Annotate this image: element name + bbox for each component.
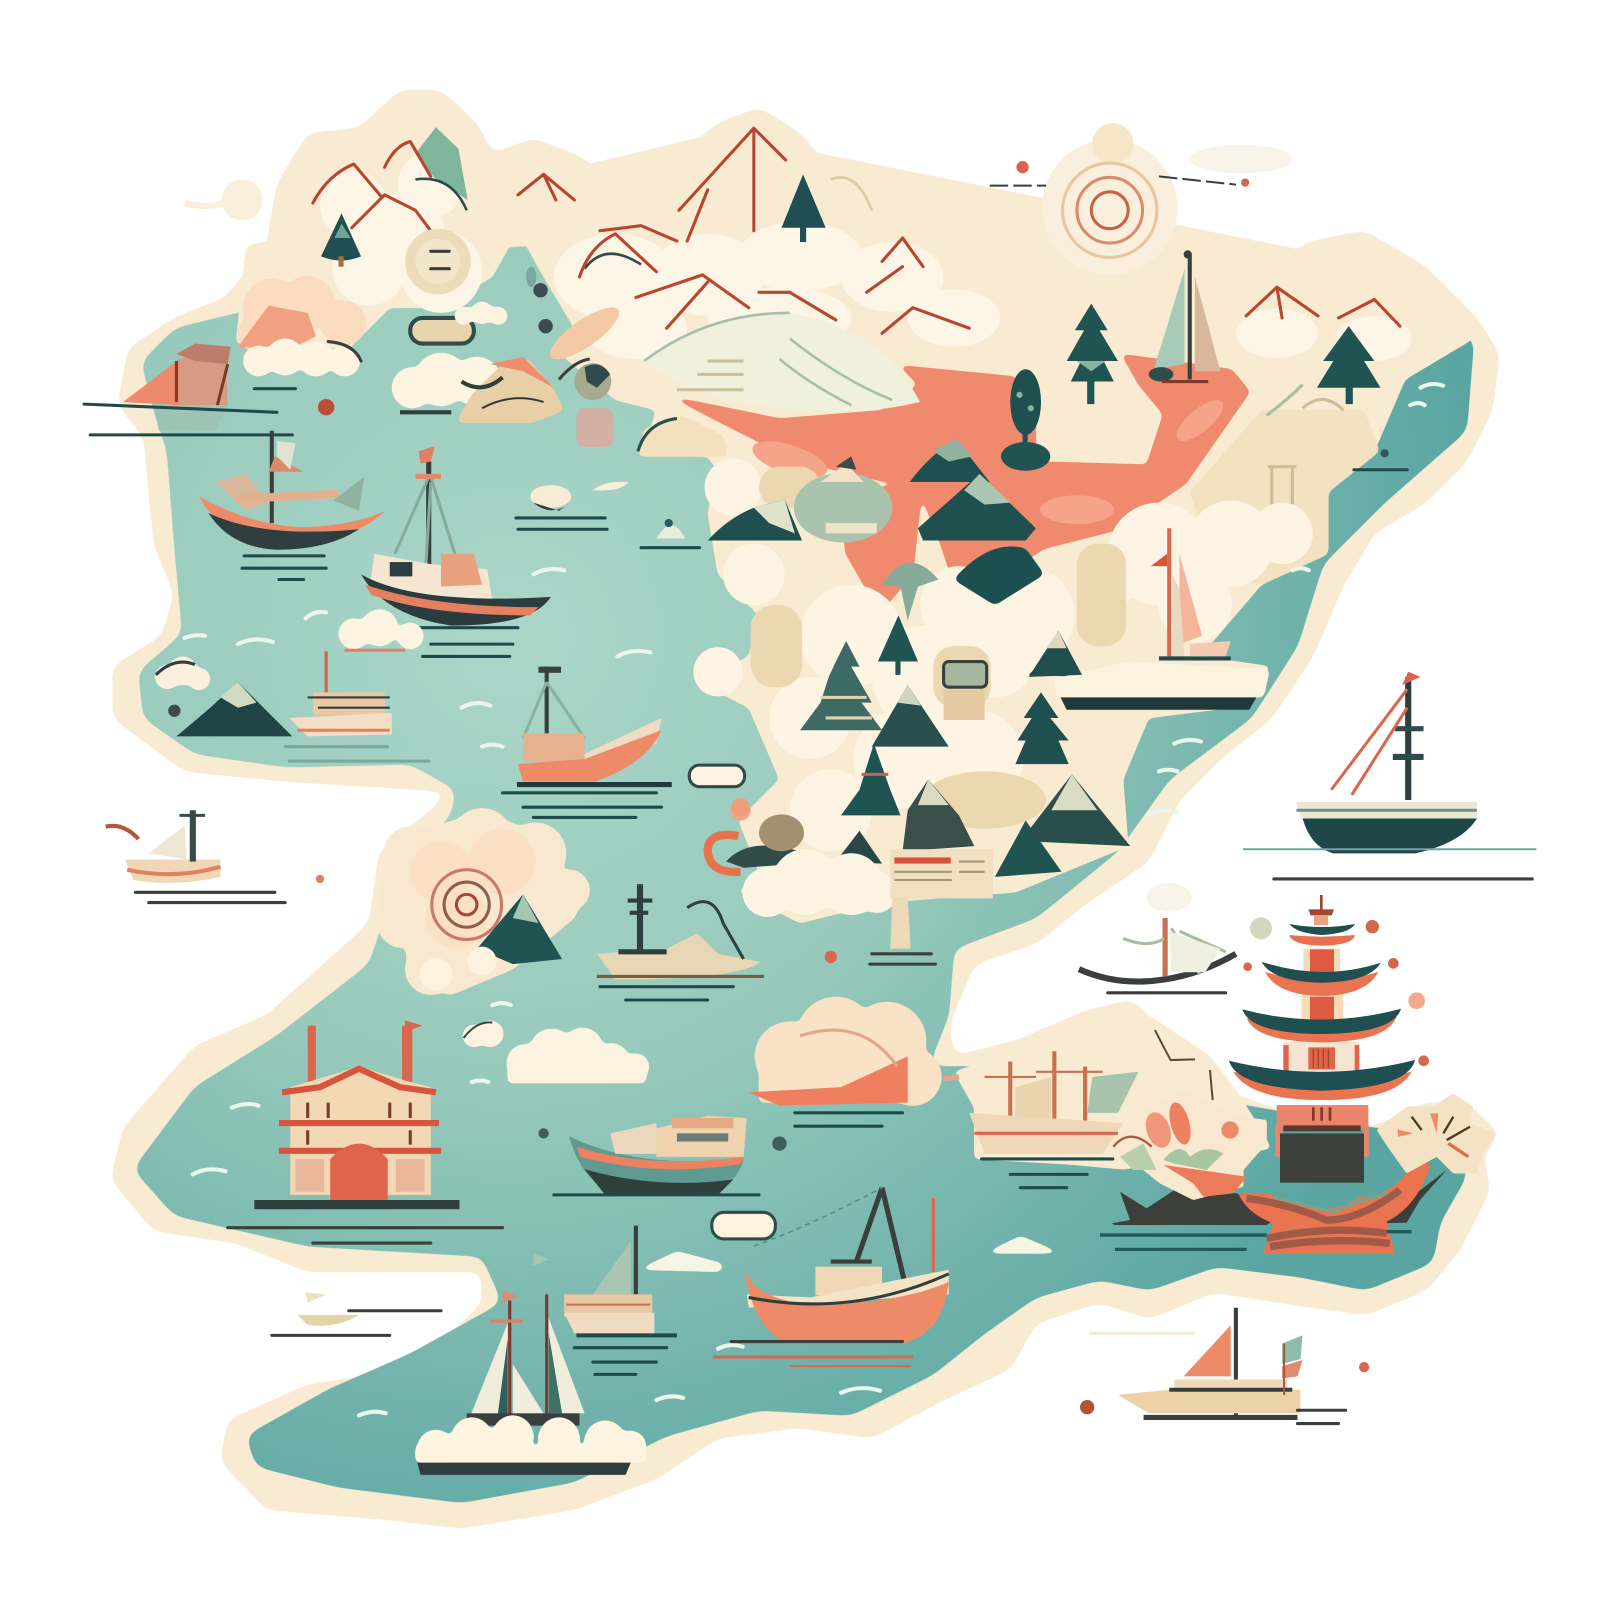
- small mountain east cape: [1029, 631, 1082, 677]
- beacon: [870, 897, 935, 964]
- cloud: ringed south: [712, 1212, 775, 1239]
- tree: coral pine: [1001, 369, 1050, 471]
- dark marker dot: [825, 951, 837, 963]
- tree: north pine: [782, 174, 826, 242]
- east waves: [1147, 384, 1443, 815]
- tug lines: [600, 987, 733, 1000]
- cloud: white mini: [638, 1236, 1062, 1272]
- flag twin sail: [503, 1253, 549, 1303]
- boat: west small: [289, 651, 392, 736]
- flower: right petals: [1377, 1093, 1497, 1173]
- peach volcano: [238, 276, 366, 352]
- boat lines large: [713, 1342, 913, 1366]
- dark mound: [954, 547, 1044, 605]
- cloud: small over sea: [338, 609, 424, 650]
- flower: left cluster: [1110, 1030, 1267, 1200]
- cloud: west shore: [243, 338, 361, 376]
- boat: fishing trawler: [361, 446, 551, 626]
- dark dots north: [526, 267, 553, 333]
- waves west: [185, 569, 880, 1415]
- swirl: [410, 829, 535, 949]
- dark cloud marker east: [1354, 449, 1407, 470]
- peach log: [543, 299, 626, 368]
- lines green hull: [554, 1193, 759, 1196]
- boat lines 3: [516, 518, 607, 529]
- canoe: [1079, 918, 1236, 993]
- lines below red boat: [795, 1113, 903, 1126]
- pagoda tree: [800, 641, 882, 730]
- east sailboat: [1151, 528, 1231, 658]
- cloud island with boat base: [1054, 662, 1270, 710]
- boat: green hull central: [569, 1116, 747, 1195]
- curl creature: [708, 800, 804, 872]
- sage tree: [882, 563, 938, 621]
- island: swirl headland: [377, 808, 590, 995]
- boat: red hull west: [199, 431, 386, 550]
- cloud island south: [415, 1415, 646, 1475]
- boat: large coral hull: [744, 1188, 949, 1344]
- boat: south small: [564, 1226, 677, 1335]
- ship lines: [982, 1159, 1113, 1188]
- boat lines west small: [285, 747, 429, 761]
- sailboat inland: [1149, 250, 1221, 382]
- pavilion: [944, 662, 987, 720]
- tan eastern slope: [1190, 410, 1379, 585]
- tree: east pine: [1317, 326, 1381, 404]
- dark mountains south: [872, 641, 1082, 764]
- orange dot: [731, 798, 750, 816]
- tree: island pine: [1067, 304, 1118, 404]
- hill contour arcs: [415, 177, 872, 269]
- shore lines west: [84, 389, 295, 435]
- mountain: west headland: [708, 499, 802, 541]
- pink building: [890, 849, 993, 898]
- boat lines 1: [242, 556, 326, 579]
- small cloud northwest: [185, 179, 263, 221]
- twin sail boat: [467, 1294, 585, 1431]
- dinghy lines: [135, 892, 285, 903]
- pine: center: [878, 615, 918, 675]
- small buoy: [641, 519, 699, 548]
- island: east shore behind pagoda: [954, 1015, 1272, 1169]
- tiny boat far: [272, 1292, 441, 1335]
- east coast scribbles: [1267, 385, 1344, 523]
- cloud: small north: [454, 302, 508, 325]
- boat southeast: [1118, 1308, 1303, 1417]
- southeast dots: [1080, 1362, 1369, 1414]
- dark mountain cluster: [910, 439, 990, 482]
- faded pink figure: [576, 408, 613, 447]
- red mountain ridges: [313, 128, 1400, 333]
- pagoda: [1100, 895, 1447, 1253]
- cloud: small ring far west: [155, 656, 210, 717]
- dark knot: [559, 359, 611, 400]
- clouds below swirl: [419, 947, 496, 991]
- sea: [133, 246, 1474, 1503]
- cloud: ringed: [410, 318, 474, 344]
- large snow mountain: [918, 474, 1036, 541]
- red dot: [318, 399, 334, 415]
- medallion: [405, 229, 471, 294]
- central peninsula clouds: [693, 458, 1313, 851]
- tree: north small: [321, 213, 361, 267]
- north snow hills: [320, 152, 1411, 361]
- ship lines: [1243, 849, 1536, 879]
- cloud: south clouds: [463, 1021, 649, 1083]
- tan cliffs: [751, 467, 1126, 829]
- boat lines 2: [405, 628, 518, 656]
- cloud island: central shore: [392, 353, 564, 423]
- temple lines: [228, 1228, 503, 1243]
- red dot far west: [316, 875, 324, 883]
- sun swirl: [1042, 123, 1177, 275]
- right ship: [1296, 672, 1477, 853]
- cream island red boat: [749, 997, 959, 1106]
- dots: [538, 1128, 787, 1151]
- sun rays and dots: [990, 145, 1292, 187]
- snowy peaks: [836, 774, 1130, 877]
- tree: red-banded: [841, 744, 901, 815]
- boat: central pink hull: [517, 667, 672, 785]
- dome shell: [644, 313, 920, 412]
- cloud: central sea: [689, 765, 745, 787]
- cream sticker border: [111, 90, 1499, 1528]
- mountain island west: [176, 682, 292, 736]
- rock cloud: [638, 415, 728, 456]
- cloud: south of peninsula: [743, 849, 897, 917]
- boulder north sea: [530, 482, 629, 511]
- temple: [254, 1021, 459, 1209]
- smoke above canoe: [1147, 883, 1192, 912]
- sailing ship east: [969, 1051, 1138, 1154]
- boat lines central: [503, 793, 662, 817]
- green gem: [415, 127, 468, 200]
- coral highlights: [748, 393, 1229, 524]
- southeast boat lines: [1089, 1333, 1346, 1424]
- wrecked sail: [123, 344, 231, 431]
- land mass: [236, 133, 1474, 923]
- boat: central tug: [597, 884, 764, 979]
- boat: far west dinghy: [106, 810, 221, 883]
- lines small south: [574, 1348, 667, 1374]
- sage dome: [794, 456, 892, 543]
- coral plain: [669, 354, 1250, 613]
- dark mountain at swirl: [477, 894, 562, 964]
